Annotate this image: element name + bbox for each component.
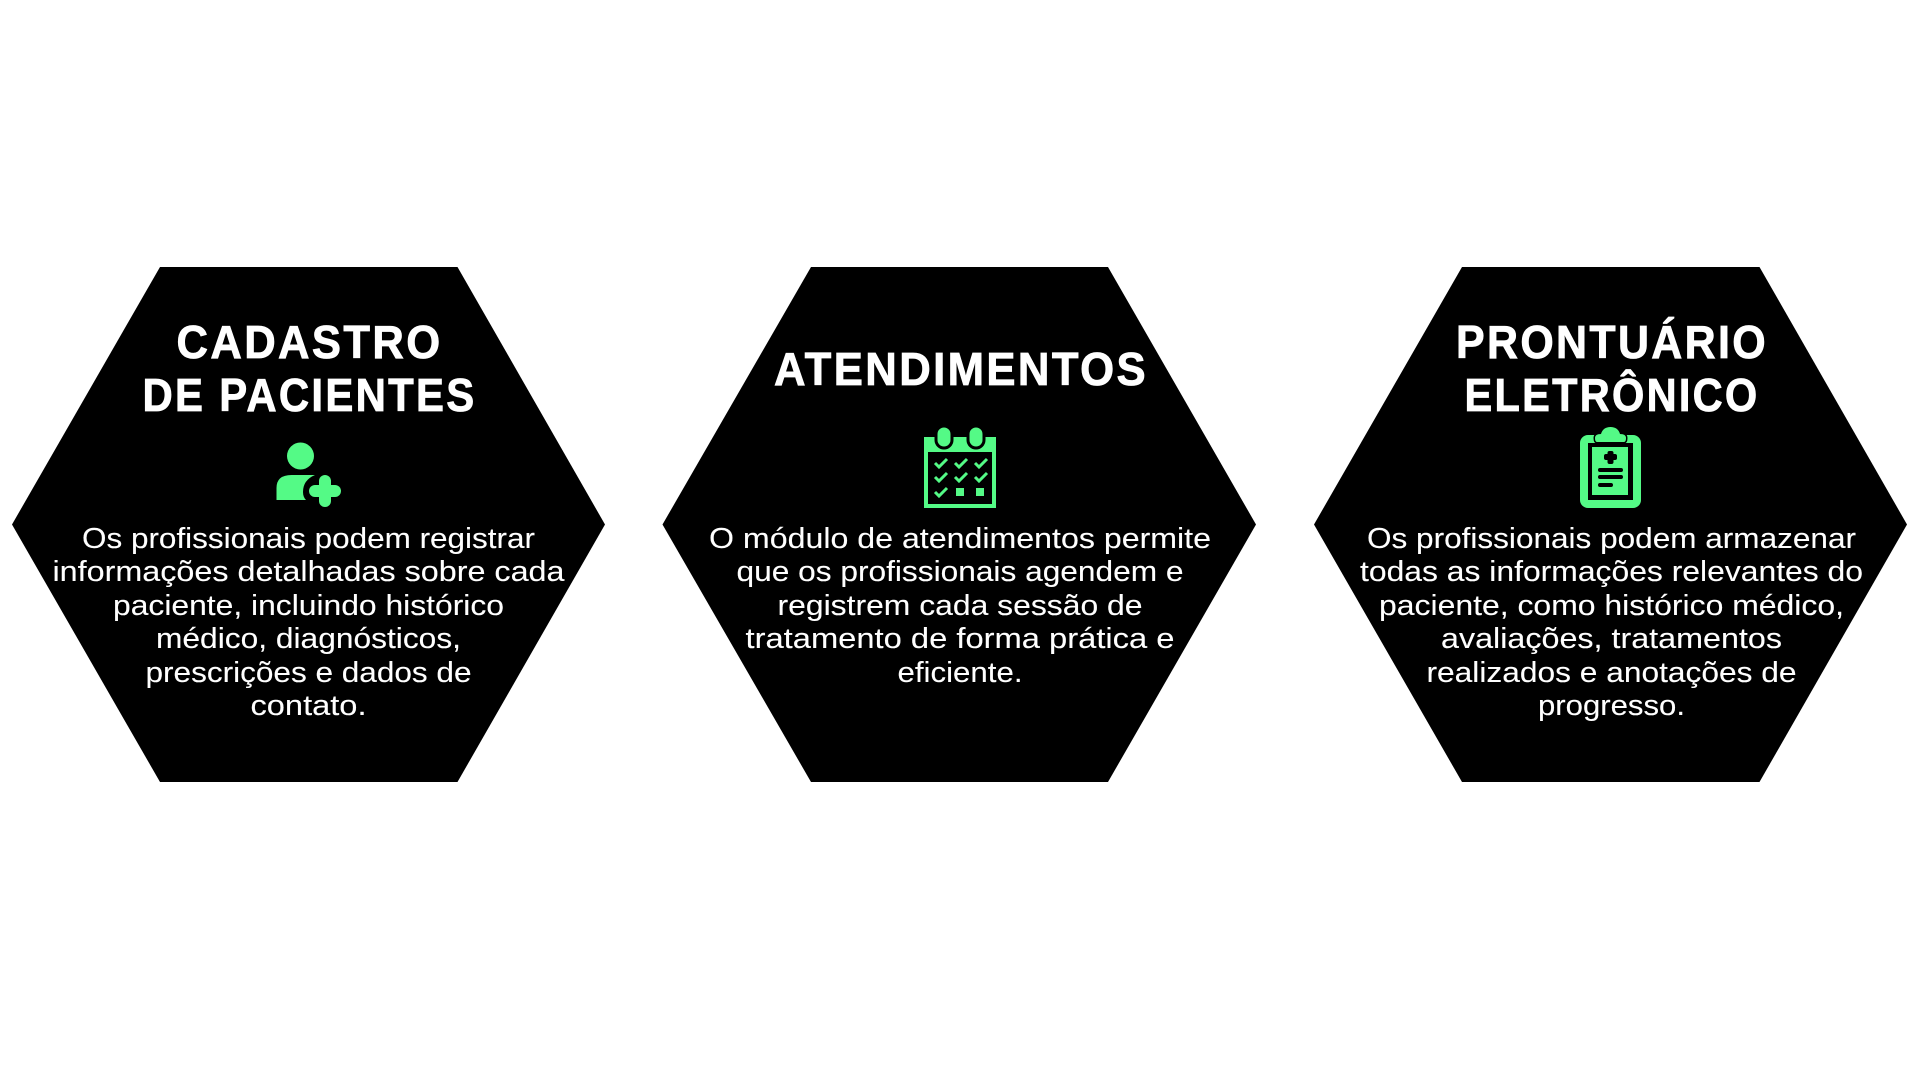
hexagon background	[662, 267, 1256, 782]
hexagon background	[1314, 267, 1907, 782]
heading: atendimentos: ATENDIMENTOS	[774, 343, 1148, 395]
heading: cadastro de pacientes	[142, 316, 476, 421]
body text: Os profissionais podem armazenar	[1367, 523, 1856, 555]
heading: prontuario eletronico	[1456, 316, 1768, 421]
body text: contato.	[250, 690, 366, 722]
body text: paciente, como histórico médico,	[1379, 590, 1844, 622]
body text: que os profissionais agendem e	[736, 556, 1184, 588]
body text: eficiente.	[898, 657, 1022, 689]
body text: paciente, incluindo histórico	[113, 590, 504, 622]
icon: calendar	[924, 426, 996, 508]
panel: cadastro de pacientes	[12, 267, 605, 782]
heading: prontuario eletronico: ELETRÔNICO	[1464, 369, 1760, 421]
body text: médico, diagnósticos,	[156, 623, 461, 655]
body text: realizados e anotações de	[1426, 657, 1796, 689]
body text: prescrições e dados de	[146, 657, 472, 689]
body text: todas as informações relevantes do	[1360, 556, 1863, 588]
body text: Os profissionais podem registrar	[82, 523, 535, 555]
body text: registrem cada sessão de	[778, 590, 1142, 622]
body text: avaliações, tratamentos	[1441, 623, 1782, 655]
panel: prontuario eletronico	[1314, 267, 1907, 782]
icon: medical clipboard	[1580, 427, 1641, 508]
heading: cadastro de pacientes: DE PACIENTES	[142, 369, 476, 421]
body text	[52, 523, 565, 722]
body text: O módulo de atendimentos permite	[709, 523, 1211, 555]
hexagon background	[12, 267, 605, 782]
heading: cadastro de pacientes: CADASTRO	[176, 316, 442, 368]
body text: informações detalhadas sobre cada	[52, 556, 565, 588]
body text	[1360, 523, 1863, 722]
body text	[709, 523, 1211, 689]
body text: progresso.	[1538, 690, 1685, 722]
heading: prontuario eletronico: PRONTUÁRIO	[1456, 316, 1768, 368]
body text: tratamento de forma prática e	[746, 623, 1174, 655]
icon: person with plus	[276, 442, 341, 507]
clip	[1595, 427, 1626, 442]
panel: atendimentos	[662, 267, 1256, 782]
